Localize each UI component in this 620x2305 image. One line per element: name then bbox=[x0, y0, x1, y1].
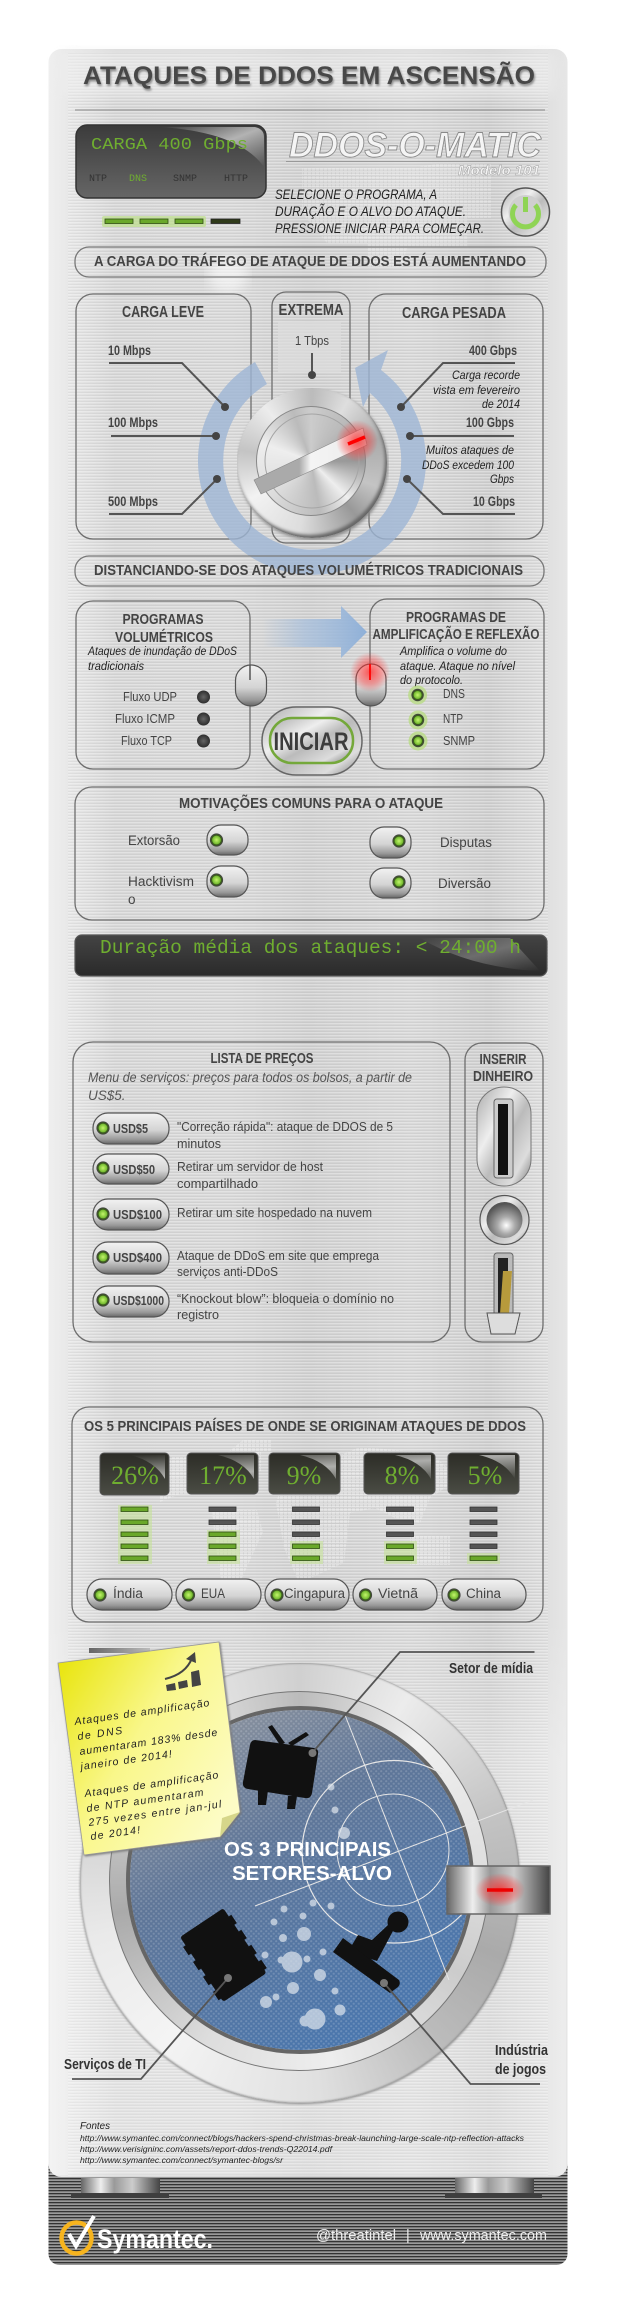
panel: programas de amplificação: DNS bbox=[443, 686, 465, 701]
panel: motivações: Diversão bbox=[438, 876, 491, 891]
arrow: blue right arrow bbox=[262, 606, 367, 658]
logo: DDOS-O-MATIC: Modelo 101 bbox=[458, 162, 540, 178]
callout: game industry: de jogos bbox=[495, 2062, 546, 2078]
panel: lista de preços: Retirar um site hospedado na nuvem bbox=[177, 1205, 372, 1220]
radar: target sectors bbox=[64, 1652, 550, 2107]
panel: extrema: EXTREMA bbox=[278, 302, 344, 319]
panel: extrema bbox=[272, 292, 350, 543]
toggle: volumetric bbox=[236, 665, 266, 706]
panel: carga leve bbox=[76, 294, 251, 539]
price button: USD$400 bbox=[93, 1242, 169, 1274]
panel: lista de preços: LISTA DE PREÇOS bbox=[210, 1051, 314, 1067]
panel: programas volumétricos: Ataques de inundação de DDoS bbox=[87, 646, 237, 658]
radar sweep lines bbox=[255, 1715, 533, 1980]
icon: coin button bbox=[480, 1196, 529, 1244]
button: iniciar: INICIAR bbox=[274, 728, 348, 756]
panel: top 5 countries bbox=[72, 1407, 543, 1622]
panel: programas de amplificação bbox=[370, 599, 544, 769]
note text: de NTP aumentaram bbox=[86, 1787, 205, 1815]
radar indicator plate bbox=[447, 1866, 550, 1914]
heading: traffic load: A CARGA DO TRÁFEGO DE ATAQUE DE DDOS ESTÁ AUMENTANDO bbox=[94, 253, 526, 270]
panel: motivações: Extorsão bbox=[128, 833, 180, 848]
icon: joystick bbox=[333, 1912, 408, 1993]
note text: janeiro de 2014! bbox=[78, 1748, 173, 1773]
panel: lista de preços: compartilhado bbox=[177, 1176, 258, 1191]
logo: symantec: Symantec. bbox=[97, 2224, 213, 2254]
panel: programas volumétricos: Fluxo UDP bbox=[123, 689, 177, 704]
heading: moving away from volumetric bbox=[75, 556, 544, 586]
instructions: SELECIONE O PROGRAMA, A bbox=[275, 187, 437, 202]
scale labels: right: 400 Gbps bbox=[469, 343, 517, 358]
panel: motivações: Hacktivism bbox=[128, 874, 194, 889]
country readouts: 5% bbox=[468, 1461, 502, 1490]
panel: lista de preços: US$5. bbox=[88, 1088, 126, 1103]
country buttons: China bbox=[466, 1586, 501, 1601]
scale labels: right: Muitos ataques de bbox=[426, 445, 514, 457]
panel: programas de amplificação: ataque. Ataque no nível bbox=[400, 661, 515, 673]
panel: inserir dinheiro: DINHEIRO bbox=[473, 1069, 533, 1085]
sources: Fontes bbox=[80, 2121, 110, 2132]
price button: USD$100: USD$100 bbox=[113, 1207, 162, 1222]
country readouts: 8% bbox=[385, 1461, 419, 1490]
footer links: www.symantec.com bbox=[419, 2228, 547, 2244]
country readouts: 9% bbox=[287, 1461, 321, 1490]
callout: media sector bbox=[308, 1652, 534, 1757]
panel: top 5 countries: OS 5 PRINCIPAIS PAÍSES DE ONDE SE ORIGINAM ATAQUES DE DDOS bbox=[84, 1418, 526, 1435]
scale labels: left: 100 Mbps bbox=[108, 415, 158, 430]
lcd display: load bbox=[76, 125, 266, 198]
toggle: amplification (active) bbox=[350, 652, 390, 706]
lcd display: load: HTTP bbox=[224, 174, 248, 185]
scale labels: left: 500 Mbps bbox=[108, 494, 158, 509]
country buttons: Índia bbox=[113, 1586, 143, 1601]
logo: symantec bbox=[62, 2216, 213, 2254]
country buttons: Cingapura bbox=[284, 1586, 345, 1601]
panel: programas volumétricos: Fluxo ICMP bbox=[115, 711, 175, 726]
callout: IT services bbox=[64, 1974, 232, 2079]
panel: carga pesada: CARGA PESADA bbox=[402, 305, 506, 322]
panel: programas de amplificação: SNMP bbox=[443, 733, 475, 748]
panel: programas de amplificação: Amplifica o volume do bbox=[399, 646, 508, 658]
radar heading: OS 3 PRINCIPAIS bbox=[224, 1839, 391, 1861]
icon: coin chute bbox=[487, 1253, 520, 1334]
panel: lista de preços: minutos bbox=[177, 1136, 221, 1151]
scale labels: right: Gbps bbox=[490, 474, 514, 486]
bar meters bbox=[118, 1505, 500, 1564]
heading: moving away from volumetric: DISTANCIANDO-SE DOS ATAQUES VOLUMÉTRICOS TRADICIONAIS bbox=[94, 562, 523, 579]
panel: lista de preços: “Knockout blow”: bloqueia o domínio no bbox=[177, 1291, 394, 1306]
callout: IT services: Serviços de TI bbox=[64, 2057, 146, 2073]
panel: motivações: MOTIVAÇÕES COMUNS PARA O ATAQUE bbox=[179, 794, 443, 812]
note text: aumentaram 183% desde bbox=[79, 1727, 218, 1758]
country readouts: 17% bbox=[199, 1461, 247, 1490]
instructions bbox=[275, 187, 484, 236]
lcd display: load: CARGA 400 Gbps bbox=[91, 135, 248, 154]
scale label: 1 Tbps bbox=[295, 333, 329, 379]
scale labels: left: 10 Mbps bbox=[108, 343, 151, 358]
panel: programas de amplificação: PROGRAMAS DE bbox=[406, 610, 506, 626]
scale labels: right: vista em fevereiro bbox=[433, 385, 521, 397]
lcd display: load: SNMP bbox=[173, 174, 197, 185]
scale labels: right: de 2014 bbox=[482, 399, 520, 411]
sources: http://www.verisigninc.com/assets/report-ddos-trends-Q22014.pdf bbox=[80, 2144, 334, 2154]
scale labels: right: Carga recorde bbox=[452, 370, 520, 382]
heading: traffic load bbox=[75, 247, 546, 277]
panel: programas de amplificação: NTP bbox=[443, 711, 463, 726]
country readouts: 26% bbox=[111, 1461, 159, 1490]
panel: lista de preços: registro bbox=[177, 1307, 219, 1322]
panel: lista de preços: "Correção rápida": ataque de DDOS de 5 bbox=[177, 1119, 393, 1134]
callout: media sector: Setor de mídia bbox=[449, 1661, 534, 1677]
icon: power button bbox=[502, 188, 550, 236]
note text: de 2014! bbox=[90, 1824, 141, 1843]
sources: http://www.symantec.com/connect/symantec-blogs/sr bbox=[80, 2155, 284, 2165]
country buttons: Vietnã bbox=[378, 1586, 419, 1601]
sources: http://www.symantec.com/connect/blogs/hackers-spend-christmas-break-launching-large-scale-ntp-reflection-attacks bbox=[80, 2133, 525, 2143]
callout: game industry: Indústria bbox=[495, 2043, 549, 2059]
panel: carga pesada bbox=[369, 294, 543, 539]
panel: programas de amplificação: do protocolo. bbox=[400, 675, 463, 687]
price button: USD$1000 bbox=[93, 1286, 169, 1317]
lcd display: attack duration: Duração média dos ataques: < 24:00 h bbox=[100, 937, 521, 959]
radar blips bbox=[260, 1784, 350, 2030]
load level leds bbox=[102, 216, 240, 227]
arrow: circular blue ring bbox=[198, 350, 426, 575]
panel: lista de preços bbox=[73, 1042, 450, 1342]
logo: DDOS-O-MATIC: DDOS-O-MATIC bbox=[289, 126, 542, 165]
panel: motivações: o bbox=[128, 892, 136, 907]
price button: USD$5 bbox=[93, 1113, 169, 1144]
panel: programas de amplificação: AMPLIFICAÇÃO E REFLEXÃO bbox=[372, 625, 540, 643]
price button: USD$50: USD$50 bbox=[113, 1162, 155, 1177]
country readouts bbox=[100, 1453, 519, 1495]
instructions: DURAÇÃO E O ALVO DO ATAQUE. bbox=[275, 204, 466, 219]
scale labels: left bbox=[108, 343, 229, 514]
world map bbox=[160, 1440, 460, 1583]
icon: bill slot bbox=[477, 1087, 531, 1186]
scale labels: right bbox=[397, 343, 521, 514]
machine feet bbox=[71, 2178, 542, 2198]
price button: USD$5: USD$5 bbox=[113, 1121, 148, 1136]
note text: Ataques de amplificação bbox=[83, 1769, 219, 1800]
sources bbox=[80, 2121, 525, 2165]
radar heading bbox=[224, 1839, 392, 1885]
note text: Ataques de amplificação bbox=[73, 1697, 210, 1728]
footer links: | bbox=[406, 2228, 410, 2244]
footer links bbox=[316, 2228, 547, 2244]
country buttons: EUA bbox=[201, 1586, 225, 1601]
panel: lista de preços: Ataque de DDoS em site que emprega bbox=[177, 1248, 380, 1263]
title: ATAQUES DE DDOS EM ASCENSÃO bbox=[83, 60, 535, 90]
panel: lista de preços: Menu de serviços: preços para todos os bolsos, a partir de bbox=[88, 1070, 412, 1085]
panel: carga leve: CARGA LEVE bbox=[122, 304, 204, 321]
icon: server chip bbox=[178, 1906, 269, 2004]
icon: load dial knob bbox=[237, 388, 389, 540]
button: iniciar bbox=[262, 707, 362, 775]
radar heading: SETORES-ALVO bbox=[232, 1863, 392, 1885]
scale labels: right: 100 Gbps bbox=[466, 415, 514, 430]
scale labels: right: DDoS excedem 100 bbox=[422, 460, 515, 472]
price button: USD$1000: USD$1000 bbox=[113, 1293, 164, 1308]
panel: lista de preços: serviços anti-DDoS bbox=[177, 1264, 278, 1279]
callout: game industry bbox=[380, 1979, 549, 2084]
panel: inserir dinheiro bbox=[465, 1043, 543, 1342]
footer links: @threatintel bbox=[316, 2228, 396, 2244]
note text bbox=[73, 1697, 223, 1843]
lcd display: load: NTP bbox=[89, 174, 107, 185]
instructions: PRESSIONE INICIAR PARA COMEÇAR. bbox=[275, 221, 484, 236]
panel: programas volumétricos: VOLUMÉTRICOS bbox=[115, 629, 213, 646]
note text: de DNS bbox=[77, 1725, 123, 1743]
price button: USD$100 bbox=[93, 1199, 169, 1230]
icon: television bbox=[243, 1725, 318, 1809]
note text: 275 vezes entre jan-jul bbox=[87, 1798, 223, 1829]
panel: motivações: Disputas bbox=[440, 835, 492, 850]
icon: rising chart bbox=[165, 1652, 201, 1691]
panel: programas volumétricos: tradicionais bbox=[88, 661, 144, 673]
price button: USD$50 bbox=[93, 1154, 169, 1184]
scale label: 1 Tbps: 1 Tbps bbox=[295, 333, 329, 348]
panel: inserir dinheiro: INSERIR bbox=[480, 1052, 527, 1068]
lcd display: load: DNS bbox=[129, 174, 147, 185]
panel: lista de preços: Retirar um servidor de host bbox=[177, 1159, 323, 1174]
panel: motivações bbox=[75, 787, 544, 920]
sticky note bbox=[58, 1642, 240, 1855]
panel: programas volumétricos bbox=[76, 601, 250, 769]
lcd display: attack duration bbox=[75, 935, 547, 976]
scale labels: right: 10 Gbps bbox=[473, 494, 515, 509]
country buttons bbox=[87, 1579, 526, 1610]
panel: programas volumétricos: PROGRAMAS bbox=[122, 612, 204, 628]
panel: programas volumétricos: Fluxo TCP bbox=[121, 733, 172, 748]
price button: USD$400: USD$400 bbox=[113, 1250, 162, 1265]
